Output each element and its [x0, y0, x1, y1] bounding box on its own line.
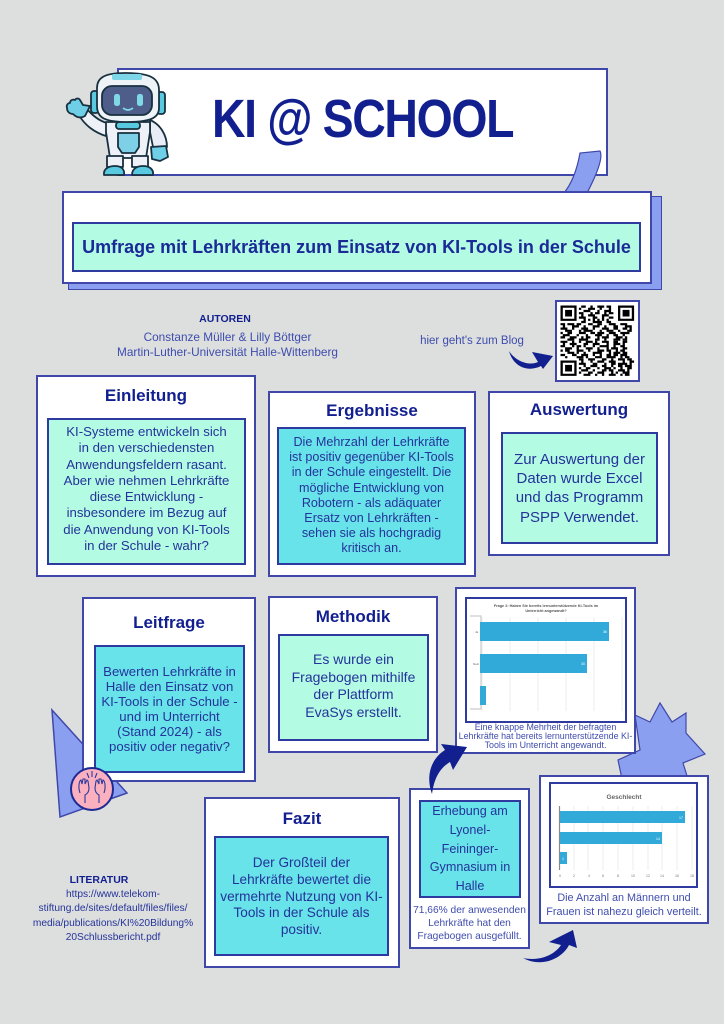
Fazit text: Der Großteil der [253, 855, 350, 870]
bar chart: Geschlecht: 14 [660, 874, 664, 878]
icon: waving robot [66, 72, 169, 176]
chart caption: Tools im Unterricht angewandt. [485, 740, 606, 750]
Erhebung caption: 71,66% der anwesenden [413, 905, 526, 916]
Leitfrage text: und im Unterricht [119, 709, 220, 724]
icon: pink hands badge [70, 767, 114, 811]
bar chart: Geschlecht: 6 [602, 874, 604, 878]
panel: Einleitung [36, 375, 256, 577]
bar chart: Geschlecht: 17 [679, 816, 683, 820]
bar chart: Geschlecht: 12 [646, 874, 650, 878]
bar chart: Frage 2: Frage 2: Haben Sie bereits lernunterstützende KI-Tools im [494, 604, 599, 608]
authors text [117, 330, 338, 358]
Erhebung caption: Fragebogen ausgefüllt. [417, 931, 522, 942]
heading: Auswertung: Auswertung [530, 400, 628, 419]
bar chart: Geschlecht [549, 782, 698, 888]
Leitfrage text: Halle den Einsatz von [106, 679, 233, 694]
bar chart: Frage 2: 30 [581, 662, 585, 666]
authors text: Constanze Müller & Lilly Böttger [144, 330, 311, 344]
Einleitung text: die Anwendung von KI-Tools [63, 522, 230, 537]
bar chart: Geschlecht: 1 [562, 857, 564, 861]
Einleitung text: in den verschiedensten [79, 440, 214, 455]
Auswertung text: Zur Auswertung der [514, 451, 645, 468]
panel: Leitfrage [82, 597, 256, 782]
panel: Methodik [268, 596, 438, 753]
literature text: https://www.telekom- [66, 889, 160, 900]
title panel [117, 68, 608, 176]
heading: Einleitung: Einleitung [105, 386, 187, 405]
Leitfrage text: (Stand 2024) - als [117, 724, 222, 739]
Auswertung text: PSPP Verwendet. [520, 509, 639, 526]
Fazit text: positiv. [281, 922, 322, 937]
Ergebnisse text: sehen sie als hochgradig [302, 526, 441, 540]
heading: Ergebnisse: Ergebnisse [326, 401, 418, 420]
chart caption [546, 892, 702, 918]
panel: chart gender [539, 775, 709, 924]
Leitfrage text: positiv oder negativ? [109, 739, 230, 754]
bar chart: Frage 2: 36 [603, 630, 607, 634]
bar chart: Geschlecht: 18 [690, 874, 694, 878]
subtitle: Umfrage mit Lehrkräften zum Einsatz von KI-Tools in der Schule [82, 237, 631, 257]
Ergebnisse text: Robotern - als adäquater [302, 496, 441, 510]
heading: Fazit: Fazit [283, 809, 321, 828]
Ergebnisse text: Ersatz von Lehrkräften - [304, 511, 439, 525]
authors heading: AUTOREN [199, 313, 251, 325]
QR code [555, 300, 640, 382]
subtitle [72, 222, 641, 272]
Methodik text: Es wurde ein [313, 651, 394, 667]
bar chart: Frage 2: Ja [475, 630, 478, 634]
Fazit text [214, 836, 389, 956]
panel: Fazit [204, 797, 400, 968]
bar chart: Geschlecht: 16 [675, 874, 679, 878]
title: KI @ SCHOOL [212, 89, 513, 149]
bar chart: Geschlecht: 2 [573, 874, 575, 878]
subtitle shadow block [68, 196, 662, 290]
literature text [33, 889, 193, 943]
chart caption: Die Anzahl an Männern und [557, 892, 691, 904]
bar chart: Geschlecht: 14 [656, 837, 660, 841]
Erhebung text: Halle [456, 879, 484, 893]
bar chart: Geschlecht: 4 [588, 874, 590, 878]
Fazit text: vermehrte Nutzung von KI- [220, 889, 383, 904]
blog hint: hier geht's zum Blog [420, 335, 524, 347]
Einleitung text: in der Schule - wahr? [84, 538, 209, 553]
bar chart: Frage 2: Nein [473, 662, 480, 666]
chart caption: Lehrkräfte hat bereits lernunterstützende KI- [459, 731, 632, 741]
subtitle panel [62, 191, 652, 284]
literature text: media/publications/KI%20Bildung% [33, 918, 193, 929]
Erhebung text: Erhebung am [432, 804, 508, 818]
Erhebung text: Gymnasium in [430, 860, 510, 874]
chart caption: Eine knappe Mehrheit der befragten [475, 722, 616, 732]
Methodik text: EvaSys erstellt. [305, 704, 402, 720]
Auswertung text: und das Programm [516, 489, 643, 506]
literature text: 20Schlussbericht.pdf [66, 932, 160, 943]
Einleitung text [47, 418, 246, 565]
panel: chart question 2 [455, 587, 636, 754]
Einleitung text: insbesondere im Bezug auf [67, 505, 226, 520]
Fazit text: Tools in der Schule als [233, 905, 370, 920]
Leitfrage text: Bewerten Lehrkräfte in [103, 664, 236, 679]
panel: Erhebung [409, 788, 530, 949]
chart caption [459, 722, 632, 750]
Fazit text: Lehrkräfte bewertet die [232, 872, 371, 887]
Ergebnisse text: Die Mehrzahl der Lehrkräfte [293, 435, 450, 449]
Erhebung text [419, 800, 521, 898]
Einleitung text: KI-Systeme entwickeln sich [66, 424, 227, 439]
bar chart: Frage 2 [465, 597, 627, 723]
Ergebnisse text: ist positiv gegenüber KI-Tools [289, 450, 454, 464]
Ergebnisse text [277, 427, 466, 565]
Methodik text: der Plattform [313, 686, 394, 702]
Einleitung text: Aber wie nehmen Lehrkräfte [64, 473, 229, 488]
Erhebung caption [413, 905, 526, 942]
bar chart: Geschlecht: Geschlecht [606, 794, 642, 801]
panel: Auswertung [488, 391, 670, 556]
Auswertung text: Daten wurde Excel [517, 470, 642, 487]
bar chart: Geschlecht: 0 [559, 874, 561, 878]
literature text: stiftung.de/sites/default/files/files/ [39, 903, 187, 914]
Einleitung text: diese Entwicklung - [90, 489, 203, 504]
literature heading: LITERATUR [70, 874, 128, 886]
Methodik text: Fragebogen mithilfe [292, 669, 415, 685]
Erhebung text: Lyonel- [450, 823, 490, 837]
panel: Ergebnisse [268, 391, 476, 577]
chart caption: Frauen ist nahezu gleich verteilt. [546, 906, 702, 918]
bar chart: Geschlecht: 8 [617, 874, 619, 878]
Erhebung caption: Lehrkräfte hat den [428, 918, 511, 929]
Leitfrage text: KI-Tools in der Schule - [101, 694, 238, 709]
Leitfrage text [94, 645, 245, 773]
bar chart: Geschlecht: 10 [631, 874, 635, 878]
Ergebnisse text: kritisch an. [341, 541, 402, 555]
Ergebnisse text: mögliche Entwicklung von [299, 481, 444, 495]
Einleitung text: Anwendungsfeldern rasant. [66, 457, 227, 472]
Auswertung text [501, 432, 658, 544]
Methodik text [278, 634, 429, 741]
Ergebnisse text: in der Schule eingestellt. Die [292, 465, 451, 479]
bar chart: Frage 2: Unterricht angewandt? [525, 609, 567, 613]
heading: Methodik: Methodik [316, 607, 390, 626]
Erhebung text: Feininger- [442, 842, 498, 856]
authors text: Martin-Luther-Universität Halle-Wittenberg [117, 344, 338, 358]
heading: Leitfrage: Leitfrage [133, 613, 205, 632]
